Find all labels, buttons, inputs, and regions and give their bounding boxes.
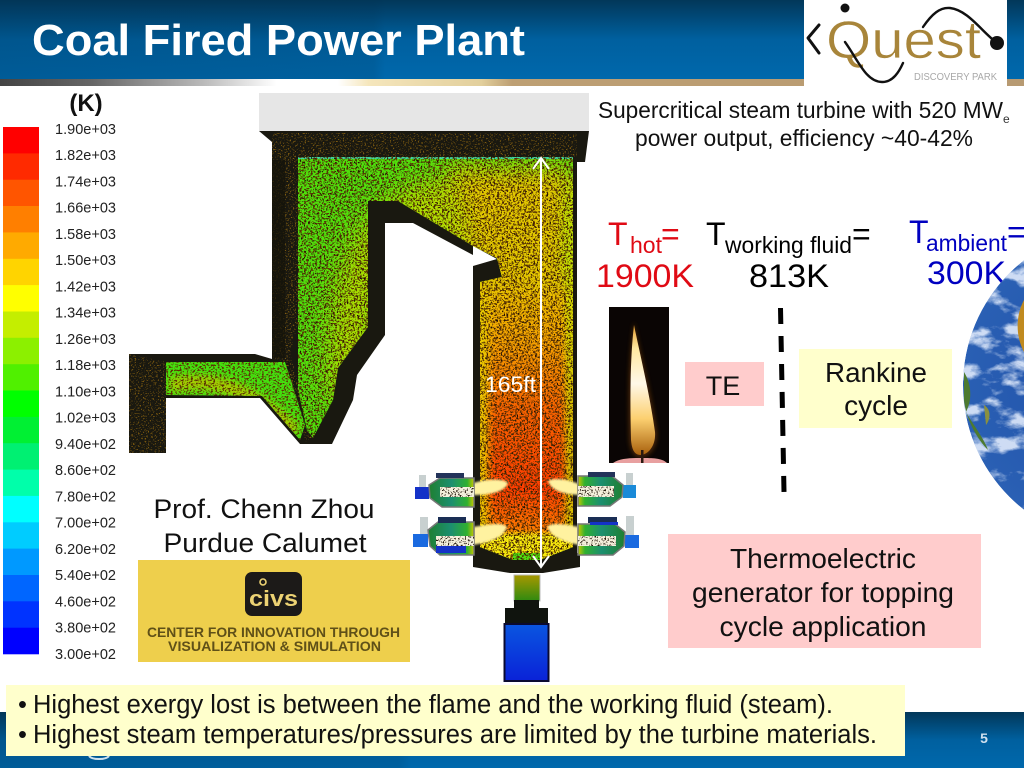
- key takeaways callout: Highest exergy lost is between the flame and the working fluid (steam).: [33, 691, 833, 719]
- CIVS name: [147, 624, 400, 654]
- T working fluid label: [706, 216, 871, 294]
- T ambient label: T: [909, 214, 929, 250]
- T hot label: =: [661, 216, 680, 252]
- color bar tick labels: 1.34e+03: [55, 305, 116, 322]
- TE box: [685, 362, 764, 406]
- burner upper right: [578, 472, 636, 506]
- color bar tick labels: 1.66e+03: [55, 200, 116, 217]
- height label: 165ft: [485, 372, 536, 397]
- turbine description: power output, efficiency ~40-42%: [635, 125, 973, 151]
- T working fluid label: 813K: [749, 258, 829, 294]
- color bar tick labels: 1.74e+03: [55, 174, 116, 190]
- left wall shade: [272, 160, 285, 358]
- T ambient label: 300K: [927, 255, 1006, 291]
- burner flames: [473, 479, 579, 545]
- researcher credit: [154, 494, 374, 558]
- color bar tick labels: 1.90e+03: [55, 121, 116, 138]
- boiler roof panel: [259, 93, 589, 131]
- temperature color bar: [3, 127, 39, 654]
- T working fluid label: working fluid: [724, 232, 852, 258]
- arm inlet speckle: [129, 354, 166, 454]
- CIVS badge text: civs: [249, 586, 298, 611]
- turbine description: e: [1003, 112, 1010, 126]
- T working fluid label: =: [852, 216, 871, 252]
- T hot label: hot: [630, 232, 663, 258]
- dashed divider: [780, 308, 784, 492]
- key takeaways callout: Highest steam temperatures/pressures are limited by the turbine materials.: [33, 721, 877, 749]
- color bar tick labels: 4.60e+02: [55, 594, 116, 610]
- researcher credit: Prof. Chenn Zhou: [154, 494, 374, 524]
- Rankine cycle box: cycle: [844, 390, 908, 421]
- TE box: TE: [706, 371, 740, 401]
- T hot label: 1900K: [596, 258, 694, 294]
- flow field: inlet arm: [166, 362, 306, 442]
- color bar tick labels: 1.82e+03: [55, 147, 116, 164]
- color bar tick labels: 8.60e+02: [55, 462, 116, 479]
- color bar tick labels: 1.42e+03: [55, 278, 116, 296]
- roof and left wall speckle: [272, 131, 582, 451]
- CFD boiler temperature simulation: [129, 93, 639, 681]
- T working fluid label: T: [706, 216, 726, 252]
- color bar tick labels: 9.40e+02: [55, 436, 116, 453]
- T ambient label: [909, 214, 1024, 291]
- key takeaways callout: [6, 685, 905, 756]
- footer band: [0, 712, 1024, 768]
- thermoelectric generator callout: generator for topping: [692, 577, 954, 608]
- color bar tick labels: 3.80e+02: [55, 620, 116, 637]
- header band: [0, 0, 1024, 79]
- color bar tick labels: 1.50e+03: [55, 252, 116, 269]
- ash chute: [505, 600, 548, 624]
- color bar tick labels: 1.18e+03: [55, 357, 116, 374]
- color bar tick labels: 1.26e+03: [55, 331, 116, 348]
- color bar tick labels: 7.80e+02: [55, 488, 116, 506]
- CIVS name: CENTER FOR INNOVATION THROUGH: [147, 624, 400, 640]
- turbine description: [598, 97, 1010, 151]
- Rankine cycle box: [799, 349, 952, 428]
- CIVS badge: [245, 572, 302, 616]
- burner lower left: [413, 517, 474, 555]
- key takeaways callout: •: [18, 691, 27, 719]
- temperature legend heading: (K): [69, 90, 103, 117]
- icon: candle flame: [609, 307, 669, 463]
- T ambient label: ambient: [926, 230, 1008, 256]
- header gradient strip: [0, 79, 1024, 86]
- title: Coal Fired Power Plant: [32, 16, 525, 65]
- boiler outer wall: [129, 131, 589, 573]
- flow field: main furnace: [298, 157, 575, 565]
- Rankine cycle box: Rankine: [825, 357, 927, 388]
- thermoelectric generator callout: cycle application: [720, 611, 926, 642]
- thermoelectric generator callout: Thermoelectric: [730, 543, 916, 574]
- logo: Quest Discovery Park: [804, 0, 1007, 86]
- thermoelectric generator callout: [668, 534, 981, 648]
- icon: earth: [963, 260, 1024, 510]
- ash throat: [514, 575, 540, 601]
- logo: Quest Discovery Park: DISCOVERY PARK: [914, 71, 997, 83]
- CIVS logo panel: [138, 560, 410, 662]
- logo: Quest Discovery Park: Quest: [826, 11, 981, 70]
- turbine description: Supercritical steam turbine with 520 MW: [598, 97, 1003, 123]
- color bar tick labels: 1.10e+03: [55, 384, 116, 400]
- color bar tick labels: [55, 121, 116, 663]
- color bar tick labels: 3.00e+02: [55, 646, 116, 663]
- ash hopper: [504, 624, 548, 681]
- height dimension arrow: [533, 158, 549, 567]
- T hot label: T: [608, 216, 628, 252]
- researcher credit: Purdue Calumet: [164, 528, 367, 558]
- color bar tick labels: 1.58e+03: [55, 226, 116, 243]
- color bar tick labels: 1.02e+03: [55, 410, 116, 427]
- key takeaways callout: •: [18, 721, 27, 749]
- page number: 5: [980, 730, 988, 746]
- CIVS name: VISUALIZATION & SIMULATION: [168, 638, 381, 654]
- color bar tick labels: 6.20e+02: [55, 541, 116, 558]
- color bar tick labels: 7.00e+02: [55, 515, 116, 532]
- burner lower right: [578, 516, 639, 555]
- color bar tick labels: 5.40e+02: [55, 567, 116, 584]
- CIVS dot: [260, 579, 266, 585]
- T hot label: [596, 216, 694, 294]
- burner upper left: [415, 473, 474, 507]
